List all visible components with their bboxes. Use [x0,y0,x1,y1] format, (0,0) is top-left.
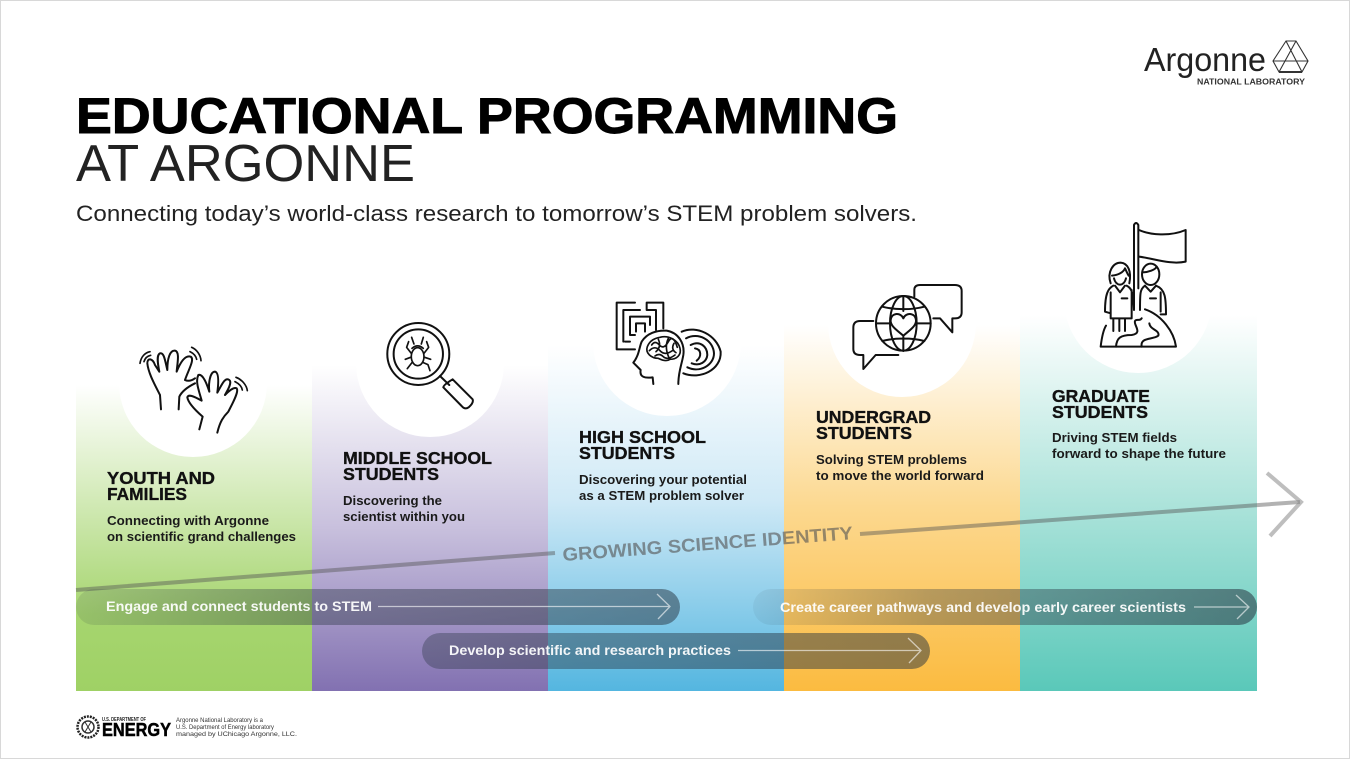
pill arrow: create career pathways [753,589,1257,625]
icon: waving hands [140,347,247,433]
footer: department of energy logo and note [78,716,297,740]
heading: middle school students [343,448,492,484]
pill arrow: develop scientific practices: Develop scientific and research practices [449,642,731,658]
icon: head with brain and mazes [617,303,721,384]
pill arrow: create career pathways: Create career pathways and develop early career scientists [780,599,1186,615]
text: youth description: Connecting with Argonne [107,513,269,528]
icon: magnifying glass with bug [387,323,473,408]
heading: high school students: STUDENTS [579,443,675,463]
footer: department of energy logo and note: U.S. DEPARTMENT OF [102,717,146,723]
panel: graduate students [1020,223,1257,691]
heading: youth and families [107,468,215,504]
title [76,88,898,193]
heading: youth and families: FAMILIES [107,484,187,504]
text: youth description: on scientific grand challenges [107,529,296,544]
heading: high school students: HIGH SCHOOL [579,427,706,447]
heading: undergrad students: UNDERGRAD [816,407,931,427]
text: undergrad description: Solving STEM problems [816,452,967,467]
heading: youth and families: YOUTH AND [107,468,215,488]
subtitle: Connecting today’s world-class research to tomorrow’s STEM problem solvers. [76,201,917,226]
pill arrow: develop scientific practices [422,633,930,669]
heading: high school students [579,427,706,463]
text: undergrad description: to move the world forward [816,468,984,483]
icon: two scientists with flag on globe [1101,223,1186,347]
arrow: growing science identity [76,473,1301,590]
title: EDUCATIONAL PROGRAMMING [76,88,898,144]
text: high school description: as a STEM problem solver [579,488,744,503]
footer: department of energy logo and note: Argonne National Laboratory is a [176,718,264,724]
icon: globe with heart and speech bubbles [853,285,962,369]
text: graduate description [1052,430,1226,461]
logo: Argonne National Laboratory: Argonne [1144,41,1266,78]
logo: Argonne National Laboratory: NATIONAL LABORATORY [1197,76,1305,86]
panel: high school students [548,268,784,691]
heading: middle school students: STUDENTS [343,464,439,484]
panel: youth and families [76,309,312,691]
text: graduate description: forward to shape the future [1052,446,1226,461]
footer: department of energy logo and note: U.S. Department of Energy laboratory [176,725,274,731]
text: undergrad description [816,452,984,483]
text: middle school description: Discovering the [343,493,442,508]
heading: graduate students: GRADUATE [1052,386,1150,406]
panel: middle school students [312,289,548,691]
text: high school description [579,472,747,503]
pill arrow: engage and connect [76,589,680,625]
footer: department of energy logo and note: ENERGY [102,720,171,740]
logo: Argonne National Laboratory [1144,41,1308,86]
arrow: growing science identity: GROWING SCIENCE IDENTITY [562,522,854,565]
text: high school description: Discovering your potential [579,472,747,487]
text: middle school description [343,493,465,524]
pill arrow: engage and connect: Engage and connect students to STEM [106,598,372,614]
heading: graduate students: STUDENTS [1052,402,1148,422]
heading: undergrad students: STUDENTS [816,423,912,443]
heading: middle school students: MIDDLE SCHOOL [343,448,492,468]
heading: graduate students [1052,386,1150,422]
panel: undergrad students [784,249,1020,691]
heading: undergrad students [816,407,931,443]
footer: department of energy logo and note: managed by UChicago Argonne, LLC. [176,732,297,738]
text: graduate description: Driving STEM fields [1052,430,1177,445]
title: AT ARGONNE [76,135,415,193]
text: middle school description: scientist within you [343,509,465,524]
text: youth description [107,513,296,544]
